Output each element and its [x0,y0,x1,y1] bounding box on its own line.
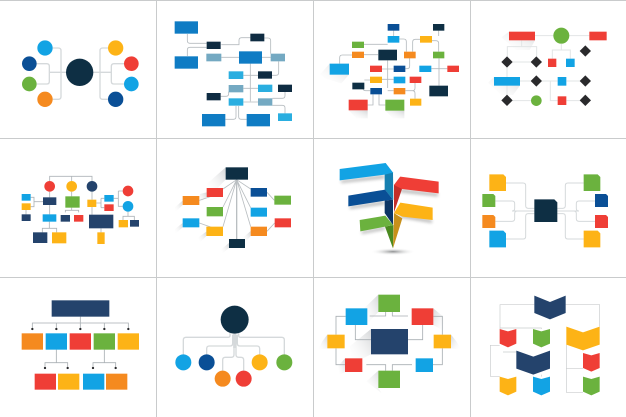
boxes [22,300,139,390]
nodes [175,306,292,387]
panel: blue flowchart [175,21,292,126]
connectors [336,312,442,371]
chevrons [500,296,600,395]
boxes [175,21,292,126]
connectors [32,317,128,367]
panel: 3D folded arrows [340,163,439,255]
connectors [183,333,284,371]
nodes [494,28,607,106]
navy arrow [348,190,393,225]
panel: ring flowchart [318,295,461,393]
green arrow [360,216,393,248]
panel: colorful flowchart [320,24,459,118]
soft drop shadows [341,175,438,234]
panel: mixed shapes flowchart [22,176,139,244]
connectors [507,36,589,101]
long shadows [320,64,404,118]
boxes [327,295,451,388]
connectors [340,31,447,105]
nodes [22,40,139,107]
panel: rounded folder mind map [482,174,608,247]
yellow arrow [393,203,433,248]
panel: decision diagram [488,28,607,106]
connectors [490,305,600,392]
connectors [199,180,275,239]
connectors [495,183,595,239]
panel: chevron flowchart [490,296,600,395]
arrowheads [31,328,129,369]
panel: mind map with circles [22,40,139,107]
connectors [37,48,124,99]
nodes [482,174,608,247]
long shadows [318,295,461,393]
long shadows [175,167,251,254]
cyan arrow [340,163,393,200]
boxes [183,167,291,248]
connectors [187,34,285,119]
red arrow [394,177,439,212]
long shadows [488,32,535,95]
panel: radial flowchart [175,167,291,254]
boxes [330,24,459,111]
panel: circle tree [175,306,292,387]
ground shadow [370,248,416,255]
panel: hierarchy of boxes [22,300,139,390]
connectors [26,176,134,232]
nodes [22,181,139,244]
